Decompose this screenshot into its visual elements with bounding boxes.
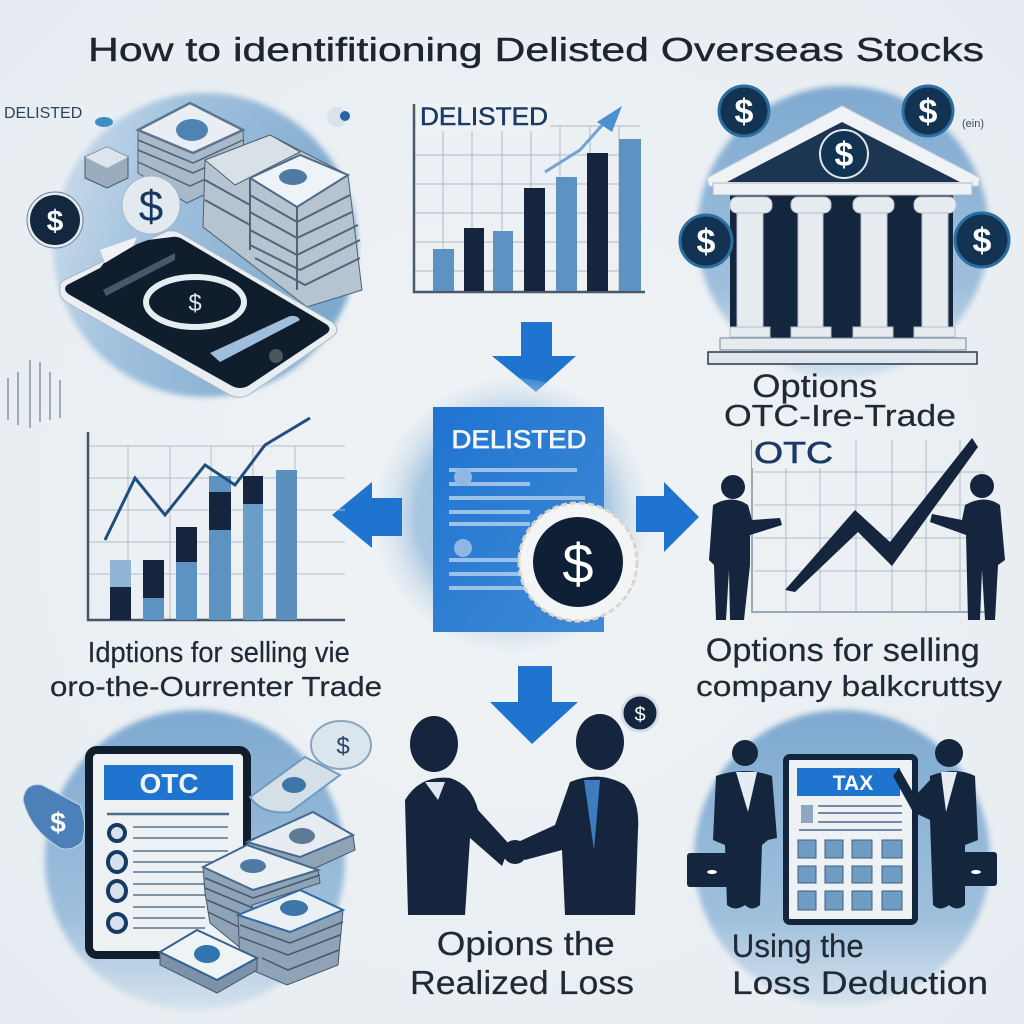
label: left options: Idptions for selling vie — [88, 637, 350, 669]
label: delisted small: DELISTED — [4, 105, 82, 122]
panel: bank: $ — [697, 223, 716, 261]
panel: bank — [680, 86, 1009, 378]
label: delisted — [416, 103, 550, 131]
label: right options: company balkcruttsy — [696, 671, 1003, 703]
arrow: right — [636, 482, 699, 552]
label: right options: Options for selling — [706, 632, 980, 668]
calculator: TAX — [833, 772, 873, 795]
icon: coin top — [122, 176, 180, 234]
illustration: handshake — [405, 714, 638, 915]
title: How to identifitioning Delisted Overseas Stocks — [88, 31, 984, 68]
central document — [375, 378, 649, 652]
document: OTC — [139, 768, 199, 799]
arrow: bottom down — [490, 666, 578, 744]
central document: DELISTED — [452, 426, 586, 454]
panel: OTC list and cash — [23, 710, 371, 1010]
icon: blue coin tag — [23, 785, 85, 849]
icon: cash stacks — [85, 103, 362, 307]
icon: seal coin — [519, 503, 637, 621]
icon: person right — [930, 474, 1005, 620]
document — [89, 750, 247, 955]
back wall — [730, 195, 953, 338]
calculator — [786, 757, 915, 922]
panel: bank: $ — [835, 136, 854, 174]
small caption: (ein) — [962, 118, 984, 130]
chart: delisted top: DELISTED — [420, 103, 548, 131]
label: left options: oro-the-Ourrenter Trade — [50, 671, 382, 702]
person left — [687, 740, 777, 908]
label: realized loss: Realized Loss — [410, 964, 634, 1001]
coins — [680, 86, 1009, 267]
roof — [707, 106, 980, 195]
icon: smartphone: $ — [188, 290, 202, 317]
icon: coin left — [27, 192, 83, 248]
label: options otc: OTC-Ire-Trade — [724, 398, 956, 433]
icon: tilted note and coin: $ — [336, 733, 350, 760]
icon: coin top: $ — [139, 182, 163, 231]
chart: delisted top — [414, 103, 645, 292]
icon: small coin: $ — [634, 704, 646, 726]
label: loss deduction: Using the — [732, 928, 864, 964]
panel: phone and cash — [4, 93, 362, 397]
arrow: left — [332, 482, 402, 548]
panel: bank: $ — [735, 93, 754, 131]
icon: coin left: $ — [47, 205, 64, 238]
right person — [518, 714, 638, 915]
arrow: top down — [492, 322, 576, 392]
icon: cash stacks — [160, 812, 355, 993]
decorative small bars — [8, 360, 60, 428]
label: loss deduction: Loss Deduction — [732, 965, 988, 1001]
icon: seal coin: $ — [562, 532, 594, 595]
chart: OTC with people — [709, 434, 1005, 620]
icon: blue coin tag: $ — [50, 807, 66, 838]
steps — [708, 338, 977, 364]
label: realized loss: Opions the — [437, 925, 615, 962]
bars — [433, 139, 641, 291]
icon: smartphone — [60, 231, 337, 397]
label: options otc: Options — [752, 368, 877, 404]
icon: small coin — [622, 695, 658, 731]
icon: tilted note and coin — [250, 721, 371, 812]
icon: person left — [709, 475, 782, 620]
decorative blobs — [95, 117, 113, 127]
chart: left bars — [88, 418, 345, 620]
person right — [893, 739, 997, 908]
columns — [730, 197, 956, 337]
panel: tax calculator — [687, 710, 997, 1006]
panel: bank: $ — [973, 222, 992, 260]
left person — [405, 716, 510, 915]
panel: bank: $ — [919, 93, 938, 131]
chart: OTC with people: OTC — [754, 435, 833, 470]
